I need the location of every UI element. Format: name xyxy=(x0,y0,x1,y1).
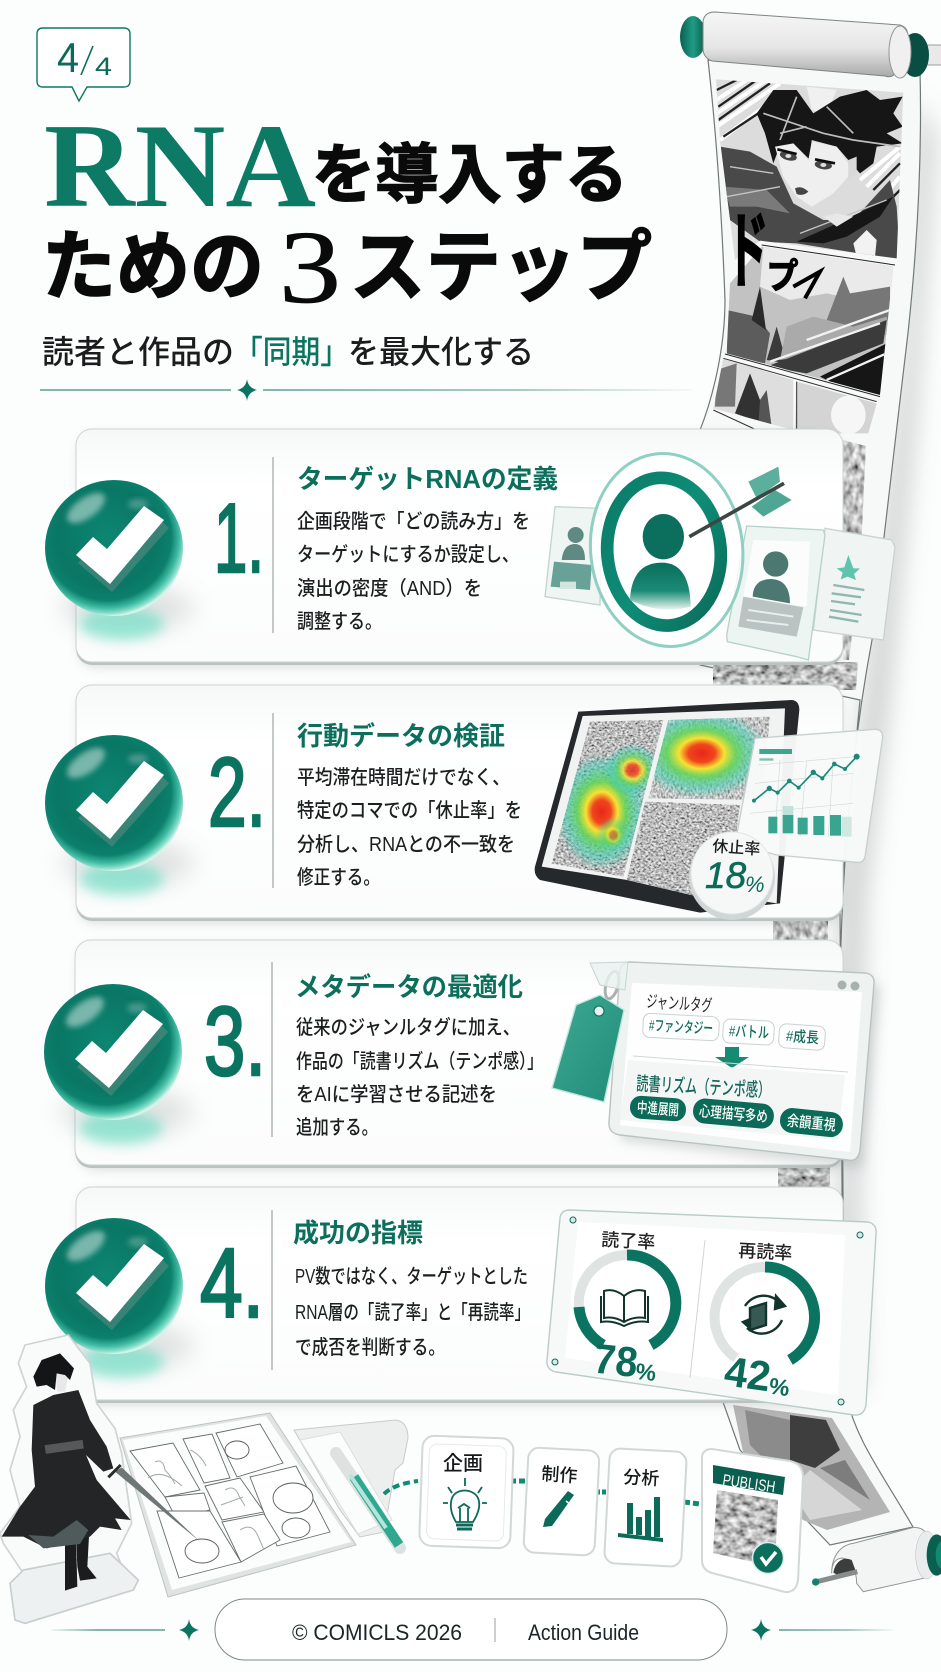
step card: production: 制作 xyxy=(541,1464,578,1486)
strip behind card 1 and gap xyxy=(843,440,866,660)
panel: step 4 xyxy=(45,1187,876,1415)
footer pill: © COMICLS 2026 xyxy=(292,1620,462,1645)
manga panels top xyxy=(712,77,907,434)
step card: planning xyxy=(419,1435,514,1549)
lower roller xyxy=(812,1527,941,1592)
step 4 heading: 成功の指標 xyxy=(293,1218,423,1248)
sketch figures xyxy=(148,1450,264,1550)
read completion gauge: 読了率 xyxy=(601,1230,656,1252)
acrylic base xyxy=(10,1553,138,1623)
upper roller xyxy=(703,12,908,77)
scroll shadow xyxy=(838,95,936,1390)
step card: analysis: 分析 xyxy=(623,1467,660,1489)
publish header: PUBLISH xyxy=(721,1472,776,1496)
check ball 3 xyxy=(44,984,193,1144)
manga scroll xyxy=(680,12,941,1592)
card 4 background xyxy=(76,1187,843,1404)
sketchbook xyxy=(120,1413,356,1597)
check ball 1 xyxy=(45,480,194,640)
footer ornament right xyxy=(751,1619,894,1641)
step 4 text: PV数ではなく、ターゲットとした xyxy=(295,1265,528,1288)
acrylic character stand xyxy=(0,1335,200,1623)
step 3 text: 追加する。 xyxy=(296,1116,378,1139)
note cards xyxy=(294,1420,408,1537)
window dots xyxy=(838,980,860,990)
subtitle: 「同期」 xyxy=(234,334,349,370)
footer ornament left xyxy=(51,1619,199,1641)
speech bubbles xyxy=(185,1441,313,1563)
hat xyxy=(807,87,837,113)
step card: planning: 企画 xyxy=(443,1452,483,1475)
hair xyxy=(757,90,903,173)
step 1 heading: ターゲットRNAの定義 xyxy=(297,464,558,494)
right profile card xyxy=(727,526,825,660)
genre chips: #バトル xyxy=(729,1023,769,1042)
panel: step 1 xyxy=(45,429,895,666)
title: 3 xyxy=(279,210,341,325)
illustration: KPI gauges xyxy=(547,1210,876,1415)
lower scroll panel xyxy=(733,1405,890,1530)
illustration: tablet heat map xyxy=(535,700,799,913)
genre chips: #成長 xyxy=(785,1028,820,1047)
step 4 text: RNA層の「読了率」と「再読率」 xyxy=(295,1301,530,1324)
step 1 text: 企画段階で「どの読み方」を xyxy=(297,510,530,533)
glass panel xyxy=(547,1210,876,1415)
step 2 heading: 行動データの検証 xyxy=(297,721,505,751)
badge: 4/4 xyxy=(37,28,130,101)
strip gap below card 3 xyxy=(778,1164,830,1192)
rhythm pills: 中進展開 xyxy=(636,1100,679,1119)
manga panels top: プ xyxy=(767,257,798,296)
window shadow xyxy=(620,975,880,1168)
publish header xyxy=(713,1465,785,1496)
tablet screen xyxy=(542,708,785,903)
target ring xyxy=(581,446,752,654)
sound effect: ド xyxy=(727,205,768,298)
character figure xyxy=(2,1353,131,1591)
manga panels on screen xyxy=(552,717,770,903)
glass window xyxy=(609,962,874,1160)
strip gap below card 1 xyxy=(713,662,858,690)
panel: castle xyxy=(726,246,894,395)
step 4 text: で成否を判断する。 xyxy=(295,1336,445,1359)
divider with star xyxy=(40,379,693,401)
genre tag label: ジャンルタグ xyxy=(646,992,713,1016)
re-read gauge: 再読率 xyxy=(738,1241,793,1263)
notes and pen xyxy=(294,1420,408,1548)
step 3 text: 従来のジャンルタグに加え、 xyxy=(296,1016,520,1039)
rhythm pills: 心理描写多め xyxy=(698,1102,769,1126)
number 2: 2. xyxy=(208,737,266,847)
publish thumbnail xyxy=(713,1490,778,1567)
step 4 text xyxy=(295,1265,530,1359)
number 4: 4. xyxy=(200,1228,264,1338)
icon: pen xyxy=(543,1491,574,1527)
step 3 heading: メタデータの最適化 xyxy=(295,972,523,1002)
step 2 text: 平均滞在時間だけでなく、 xyxy=(297,766,510,789)
rhythm section xyxy=(620,1056,848,1140)
rest rate badge: 休止率 xyxy=(712,837,761,859)
footer pill xyxy=(215,1599,727,1660)
rhythm pills xyxy=(629,1095,844,1138)
footer pill: Action Guide xyxy=(528,1620,639,1645)
step 1 text xyxy=(297,510,530,633)
genre chips: #ファンタジー xyxy=(649,1017,713,1038)
green tag xyxy=(552,962,628,1102)
title: ステップ xyxy=(350,223,652,311)
step card: publish xyxy=(702,1449,803,1592)
card 3 background xyxy=(75,940,843,1169)
step card: production xyxy=(523,1447,600,1556)
sketch panels xyxy=(130,1424,330,1578)
step 1 text: 調整する。 xyxy=(297,610,382,633)
badge: 4/4: 4 xyxy=(57,34,79,81)
read completion gauge: % xyxy=(634,1358,657,1386)
subtitle xyxy=(42,334,534,370)
window inner white xyxy=(620,983,862,1152)
publish check xyxy=(752,1542,784,1574)
check ball 2 xyxy=(45,735,194,895)
subtitle: を最大化する xyxy=(348,334,534,370)
number 3: 3. xyxy=(204,986,266,1096)
workflow dashes xyxy=(384,1481,700,1504)
tablet body xyxy=(535,700,799,913)
left profile card xyxy=(545,507,602,605)
far right star card xyxy=(813,528,895,640)
corner bolts xyxy=(552,1217,863,1405)
arrow down xyxy=(715,1047,749,1068)
rhythm pills: 余韻重視 xyxy=(786,1113,837,1135)
line chart card xyxy=(735,729,883,862)
step 3 text: 作品の「読書リズム（テンポ感）」 xyxy=(296,1049,543,1073)
re-read gauge: % xyxy=(767,1373,791,1401)
rest rate badge: % xyxy=(745,872,765,897)
step 3 text: をAIに学習させる記述を xyxy=(296,1083,497,1106)
card 2 background xyxy=(76,685,843,922)
upper roller rod xyxy=(900,45,941,65)
step 2 text: 分析し、RNAとの不一致を xyxy=(297,833,515,856)
rest rate badge xyxy=(689,832,775,920)
title: RNA xyxy=(44,99,316,232)
step 1 text: ターゲットにするか設定し、 xyxy=(297,543,519,566)
panel: step 2 xyxy=(45,685,883,922)
card 1 background xyxy=(76,429,843,666)
genre chips xyxy=(642,1013,826,1051)
rest rate badge: 18 xyxy=(705,855,747,896)
icon: refresh book xyxy=(743,1296,785,1334)
title: ための xyxy=(42,225,264,310)
panel: lower towers xyxy=(714,358,794,428)
subtitle: 読者と作品の xyxy=(42,334,234,370)
number 1: 1. xyxy=(214,483,264,593)
title xyxy=(42,99,652,325)
step 2 text xyxy=(297,766,522,889)
re-read gauge xyxy=(715,1241,814,1401)
upper roller caps xyxy=(680,16,929,77)
icon: bar chart xyxy=(618,1497,663,1542)
read completion gauge: 78 xyxy=(591,1335,640,1386)
acrylic outline xyxy=(0,1335,132,1573)
rhythm section: 読書リズム（テンポ感） xyxy=(636,1072,771,1102)
illustration: target and profile cards xyxy=(545,446,895,660)
panel: step 3 xyxy=(44,940,880,1169)
sword xyxy=(108,1465,200,1542)
step 3 text xyxy=(296,1016,543,1139)
strip gap below card 2 xyxy=(773,918,828,945)
icon: light bulb xyxy=(443,1478,487,1529)
read completion gauge xyxy=(579,1230,676,1386)
panel: hero face xyxy=(713,77,907,263)
badge: 4/4: 4 xyxy=(95,53,112,81)
face xyxy=(775,142,848,207)
dart xyxy=(689,467,792,537)
step 1 text: 演出の密度（AND）を xyxy=(297,577,482,600)
title: を導入する xyxy=(312,138,628,211)
step card: analysis xyxy=(604,1448,687,1567)
panel: bubble xyxy=(795,382,877,433)
step 2 text: 特定のコマでの「休止率」を xyxy=(297,799,522,822)
step 2 text: 修正する。 xyxy=(297,866,380,889)
check ball 4 xyxy=(45,1218,194,1378)
pen xyxy=(336,1453,400,1548)
re-read gauge: 42 xyxy=(722,1347,774,1400)
scroll paper xyxy=(700,60,920,1545)
heat map blobs xyxy=(555,708,768,870)
cape xyxy=(720,147,900,260)
illustration: metadata window and tag xyxy=(552,962,880,1168)
icon: open book xyxy=(601,1290,648,1326)
